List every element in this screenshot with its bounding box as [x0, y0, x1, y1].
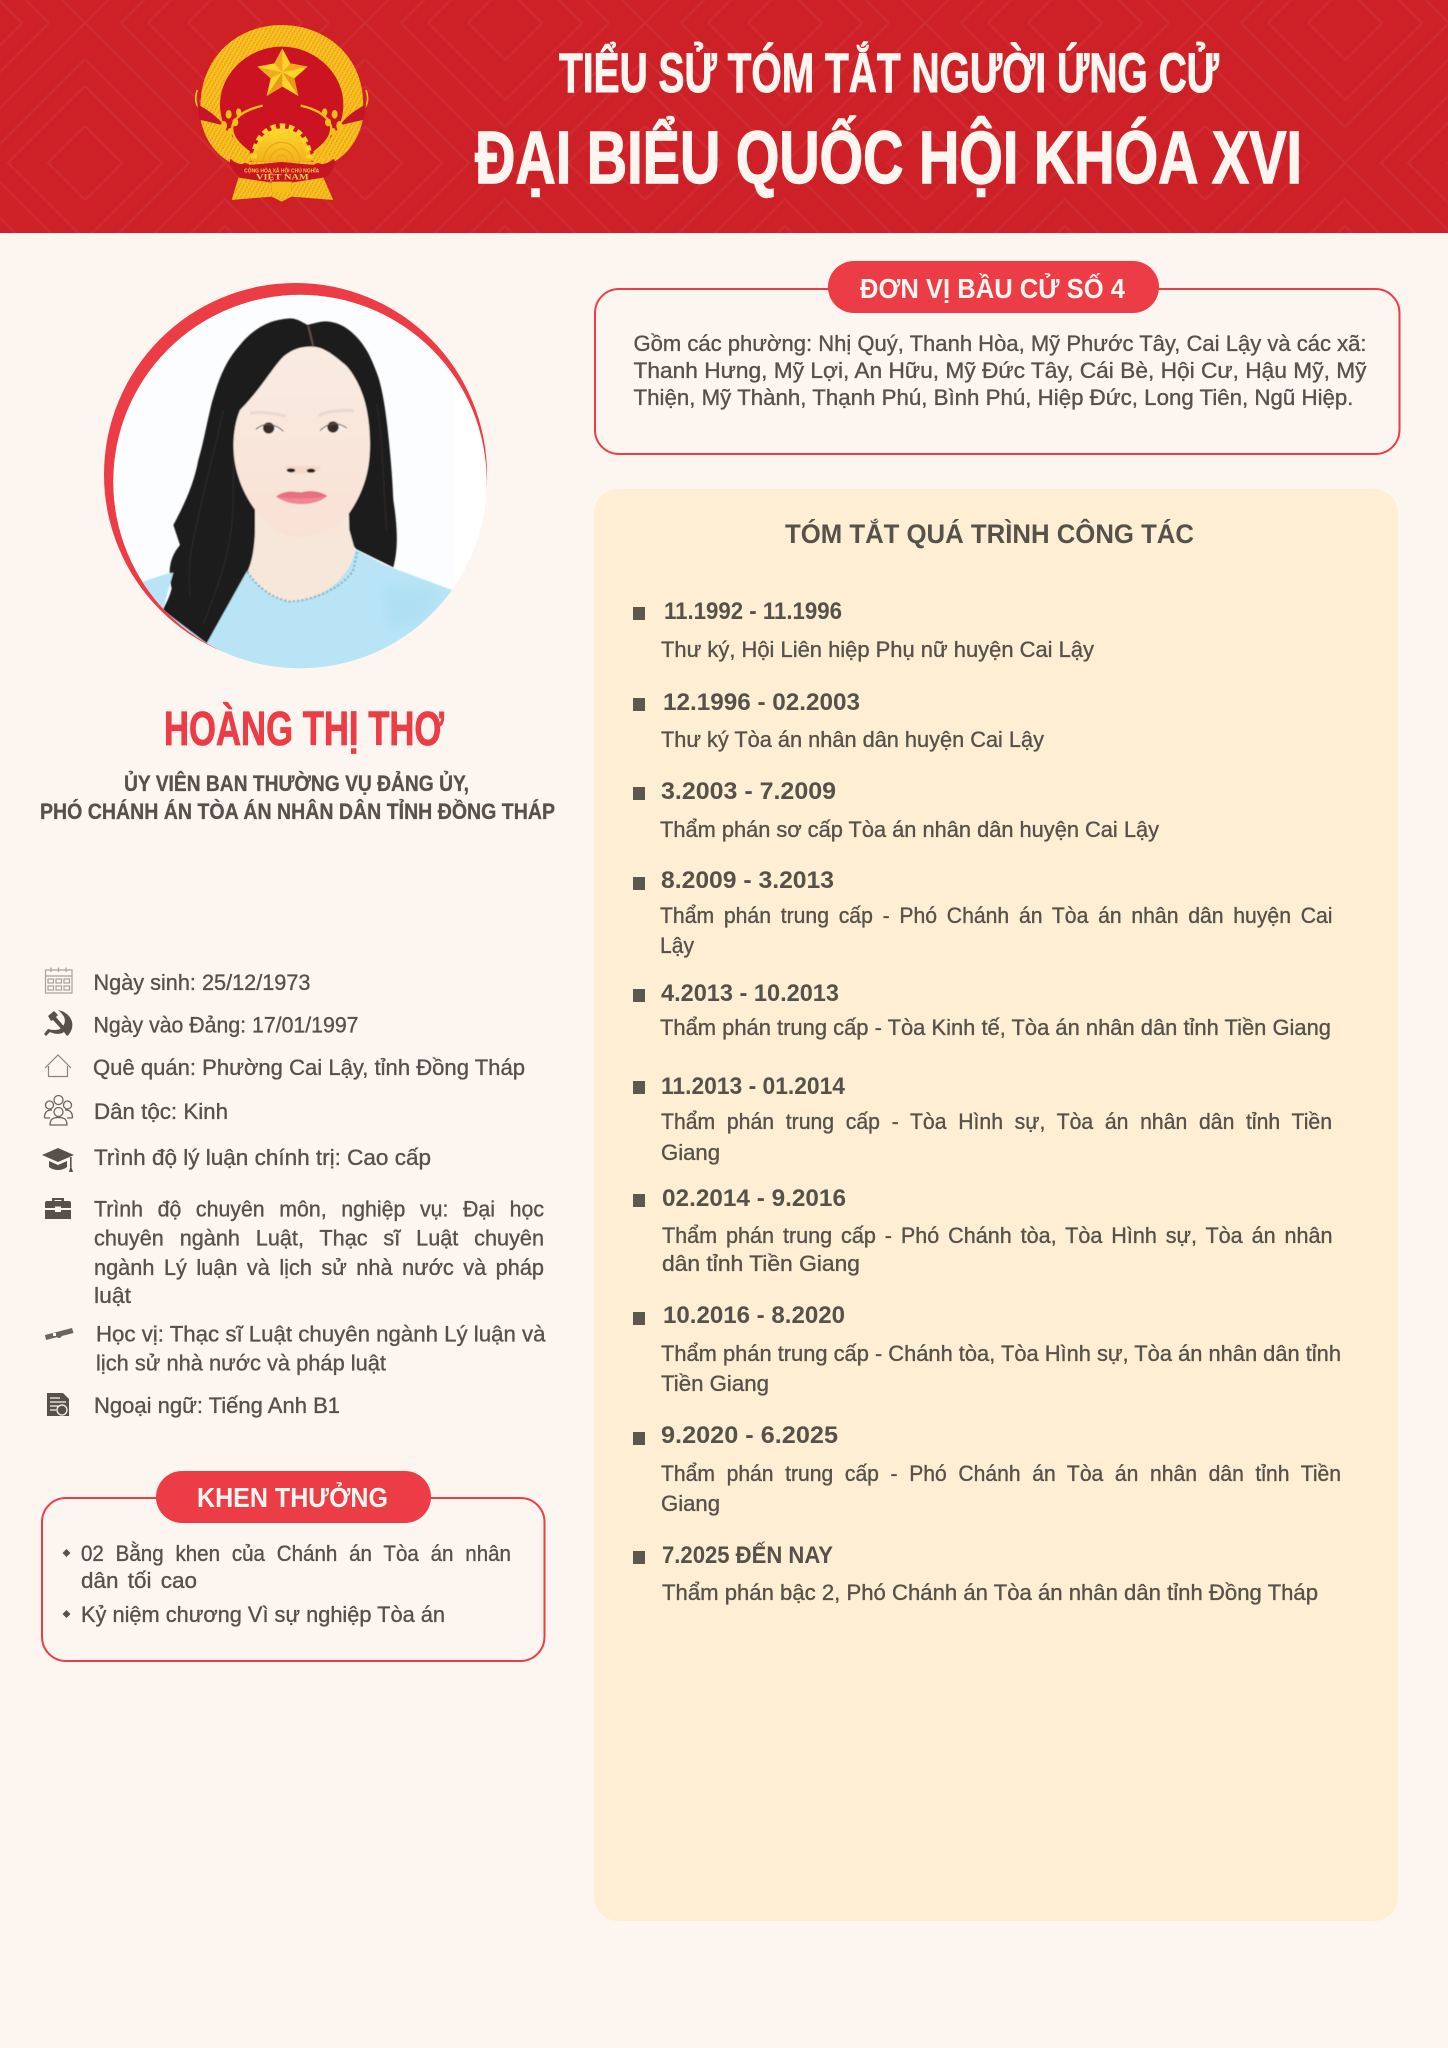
timeline entry 8: 10.2016 - 8.2020: [663, 1302, 845, 1329]
star: [257, 48, 308, 96]
candidate position: [40, 771, 555, 824]
academic degree: lịch sử nhà nước và pháp luật: [96, 1350, 386, 1376]
work history heading: TÓM TẮT QUÁ TRÌNH CÔNG TÁC: [785, 518, 1194, 549]
hair: [163, 318, 397, 643]
side ribbons: [197, 104, 227, 132]
award item 1: 02 Bằng khen của Chánh án Tòa án nhân: [81, 1541, 511, 1566]
panel: constituency: [595, 261, 1400, 454]
gear: [252, 126, 311, 162]
icon: diploma scroll: [45, 1328, 74, 1340]
awards pill heading: KHEN THƯỞNG: [197, 1481, 388, 1513]
timeline entry 9: [633, 1422, 1341, 1516]
bottom banner: [230, 158, 335, 181]
timeline entry 4: [633, 867, 1332, 958]
timeline entry 3: [633, 778, 1159, 842]
timeline entry 4: Thẩm phán trung cấp - Phó Chánh án Tòa án nhân dân huyện Cai: [660, 903, 1332, 928]
timeline entry 10: [633, 1541, 1318, 1605]
icon: house: [45, 1055, 71, 1076]
timeline entry 5: Thẩm phán trung cấp - Tòa Kinh tế, Tòa án nhân dân tỉnh Tiền Giang: [660, 1015, 1331, 1040]
emblem text: CỘNG HÒA XÃ HỘI CHỦ NGHĨA: [244, 166, 319, 174]
timeline entry 4: Lậy: [660, 933, 694, 958]
constituency description: Gồm các phường: Nhị Quý, Thanh Hòa, Mỹ Phước Tây, Cai Lậy và các xã:: [634, 331, 1366, 356]
icon: calendar: [46, 968, 72, 993]
shirt: [110, 550, 523, 703]
face: [232, 346, 371, 514]
timeline entry 10: 7.2025 ĐẾN NAY: [662, 1541, 833, 1569]
timeline entry 2: [633, 689, 1044, 752]
timeline entry 9: Thẩm phán trung cấp - Phó Chánh án Tòa án nhân dân tỉnh Tiền: [661, 1461, 1341, 1486]
red disc: [220, 47, 343, 162]
neck: [247, 500, 355, 602]
timeline entry 4: 8.2009 - 3.2013: [661, 867, 834, 894]
header banner: [0, 0, 1448, 233]
panel: work history: [594, 489, 1398, 1921]
constituency description: Thanh Hưng, Mỹ Lợi, An Hữu, Mỹ Đức Tây, Cái Bè, Hội Cư, Hậu Mỹ, Mỹ: [634, 358, 1366, 383]
icon: certificate: [47, 1393, 69, 1416]
timeline entry 9: 9.2020 - 6.2025: [661, 1422, 838, 1449]
panel: awards: [42, 1471, 544, 1661]
icon: graduation cap: [42, 1148, 74, 1172]
academic degree: [96, 1322, 546, 1376]
timeline entry 7: Thẩm phán trung cấp - Phó Chánh tòa, Tòa Hình sự, Tòa án nhân: [662, 1223, 1332, 1248]
timeline entry 3: 3.2003 - 7.2009: [661, 778, 836, 805]
portrait photo: [104, 283, 487, 668]
timeline entry 7: 02.2014 - 9.2016: [662, 1185, 846, 1212]
rice stalks: [232, 106, 263, 152]
lower wheat sheaves: [201, 120, 256, 166]
timeline entry 8: Thẩm phán trung cấp - Chánh tòa, Tòa Hình sự, Tòa án nhân dân tỉnh: [661, 1341, 1341, 1366]
timeline entry 6: 11.2013 - 01.2014: [661, 1073, 846, 1100]
timeline entry 2: 12.1996 - 02.2003: [663, 689, 860, 716]
icon: briefcase: [45, 1198, 71, 1219]
shirt shoulder shading: [390, 592, 427, 618]
party entry date: Ngày vào Đảng: 17/01/1997: [94, 1012, 358, 1038]
icon: national emblem of Vietnam: [196, 25, 368, 202]
candidate position: PHÓ CHÁNH ÁN TÒA ÁN NHÂN DÂN TỈNH ĐỒNG THÁP: [40, 799, 555, 824]
timeline entry 6: Thẩm phán trung cấp - Tòa Hình sự, Tòa án nhân dân tỉnh Tiền: [661, 1109, 1332, 1134]
award item 1: dân tối cao: [81, 1568, 197, 1593]
award item 1: [62, 1541, 511, 1593]
academic degree: Học vị: Thạc sĩ Luật chuyên ngành Lý luận và: [96, 1322, 546, 1346]
award item 2: Kỷ niệm chương Vì sự nghiệp Tòa án: [81, 1602, 445, 1627]
constituency pill heading: [828, 261, 1159, 313]
professional qualification: [94, 1196, 544, 1308]
timeline entry 8: Tiền Giang: [661, 1371, 769, 1396]
constituency description: Thiện, Mỹ Thành, Thạnh Phú, Bình Phú, Hiệp Đức, Long Tiên, Ngũ Hiệp.: [634, 385, 1354, 410]
personal information list: [42, 968, 546, 1418]
constituency description: [634, 331, 1366, 410]
timeline entry 3: Thẩm phán sơ cấp Tòa án nhân dân huyện Cai Lậy: [660, 817, 1159, 842]
awards pill heading: [156, 1471, 431, 1523]
foreign language: Ngoại ngữ: Tiếng Anh B1: [94, 1393, 340, 1418]
icon: people: [44, 1096, 72, 1125]
timeline entry 5: [633, 980, 1331, 1040]
timeline entry 10: Thẩm phán bậc 2, Phó Chánh án Tòa án nhân dân tỉnh Đồng Tháp: [662, 1580, 1318, 1605]
hometown: Quê quán: Phường Cai Lậy, tỉnh Đồng Tháp: [93, 1055, 525, 1080]
professional qualification: Trình độ chuyên môn, nghiệp vụ: Đại học: [94, 1196, 544, 1222]
professional qualification: luật: [94, 1283, 131, 1308]
timeline entry 1: [633, 598, 1094, 662]
icon: hammer and sickle: [44, 1010, 72, 1036]
birth date: Ngày sinh: 25/12/1973: [94, 970, 310, 995]
professional qualification: chuyên ngành Luật, Thạc sĩ Luật chuyên: [94, 1226, 544, 1250]
timeline entry 1: Thư ký, Hội Liên hiệp Phụ nữ huyện Cai Lậy: [661, 637, 1094, 662]
timeline entry 1: 11.1992 - 11.1996: [664, 598, 842, 625]
base: [232, 178, 333, 202]
timeline entry 8: [633, 1302, 1341, 1396]
professional qualification: ngành Lý luận và lịch sử nhà nước và pháp: [94, 1255, 544, 1280]
ethnicity: Dân tộc: Kinh: [94, 1099, 228, 1124]
timeline entry 5: 4.2013 - 10.2013: [661, 980, 839, 1007]
wreath: [200, 25, 363, 165]
timeline entry 2: Thư ký Tòa án nhân dân huyện Cai Lậy: [661, 727, 1044, 752]
timeline entry 9: Giang: [661, 1491, 720, 1516]
political theory level: Trình độ lý luận chính trị: Cao cấp: [94, 1145, 431, 1170]
timeline entry 6: Giang: [661, 1140, 720, 1165]
icon: national emblem of Vietnam: VIỆT NAM: [256, 173, 309, 182]
timeline entry 7: [633, 1185, 1332, 1276]
candidate position: ỦY VIÊN BAN THƯỜNG VỤ ĐẢNG ỦY,: [124, 771, 469, 796]
candidate name: HOÀNG THỊ THƠ: [164, 702, 444, 756]
timeline entry 7: dân tỉnh Tiền Giang: [662, 1251, 860, 1276]
constituency pill heading: ĐƠN VỊ BẦU CỬ SỐ 4: [860, 272, 1125, 304]
timeline entry 6: [633, 1073, 1332, 1165]
